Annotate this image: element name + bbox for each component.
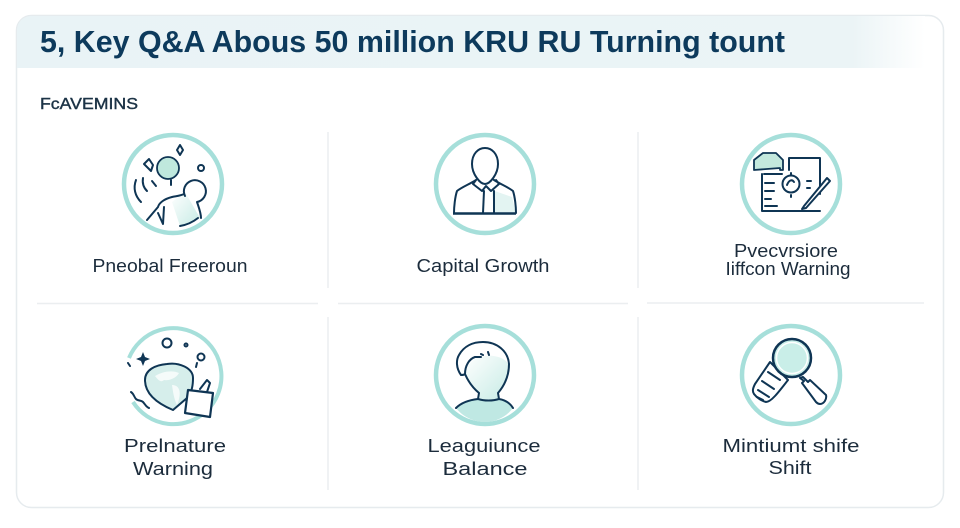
- label: Mintiumt shife: [722, 435, 860, 456]
- panel: precursor warning: [726, 135, 850, 279]
- icon: documents and pen: [742, 135, 840, 233]
- panel: leadership balance: [428, 326, 540, 479]
- label: Leaguiunce: [428, 435, 540, 456]
- label: Balance: [442, 458, 528, 479]
- label: Prelnature: [124, 435, 226, 456]
- label: [428, 435, 540, 479]
- icon: businessman: [436, 135, 534, 233]
- icon: magnifier over paper: [742, 326, 840, 424]
- header band: [17, 16, 925, 68]
- label: Warning: [133, 458, 213, 479]
- panel: personal freedom: [92, 135, 248, 276]
- label: [124, 435, 226, 479]
- panel: premature warning: [124, 328, 226, 479]
- icon: person from behind: [436, 326, 534, 424]
- label: Pvecvrsiore: [734, 240, 838, 261]
- section heading: FcAVEMINS: [40, 96, 138, 113]
- label: Iiffcon Warning: [726, 258, 850, 279]
- label: Shift: [768, 457, 812, 478]
- label: Capital Growth: [416, 255, 550, 276]
- label: [722, 435, 860, 478]
- panel: momentum shift: [722, 326, 860, 478]
- title: 5, Key Q&A Abous 50 million KRU RU Turning tount: [40, 24, 785, 59]
- panel: capital growth: [416, 135, 550, 276]
- icon: globe heart and bag: [128, 328, 221, 424]
- icon: person with idea: [124, 135, 222, 233]
- label: [726, 240, 850, 279]
- label: Pneobal Freeroun: [92, 255, 248, 276]
